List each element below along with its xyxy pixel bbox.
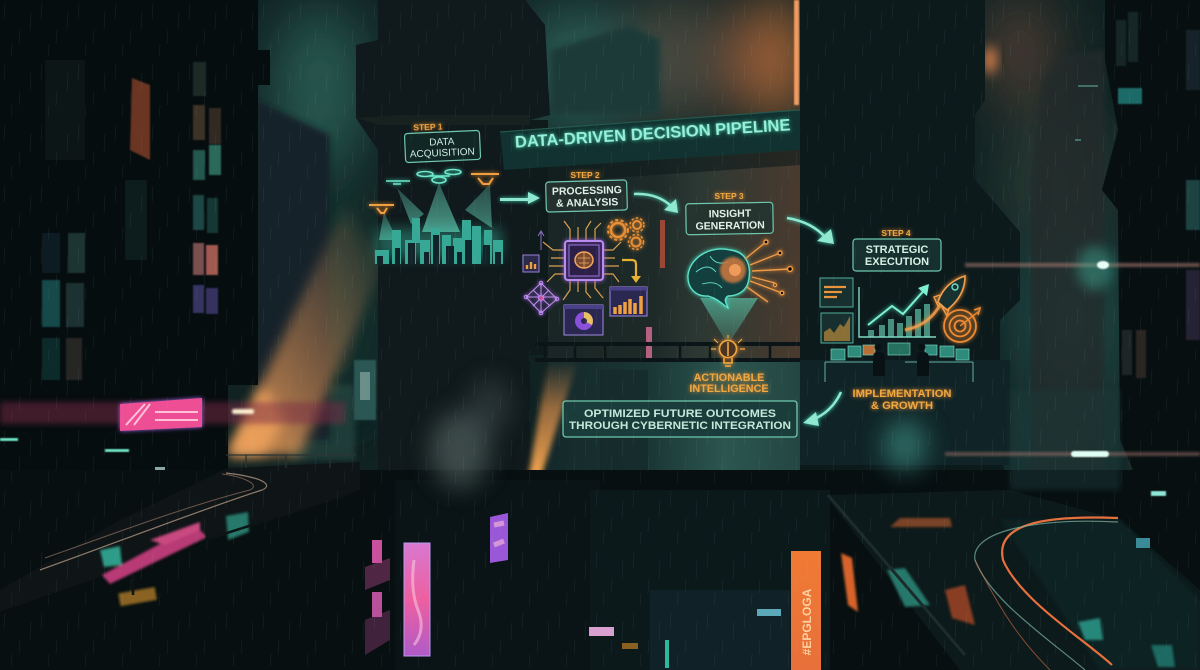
city skyline — [375, 218, 503, 265]
icon: AI chip with brain — [543, 221, 621, 300]
step 1 box: ACQUISITION — [410, 147, 475, 160]
step 4: strategic execution — [820, 228, 980, 412]
icon: neural network — [524, 281, 559, 315]
step 4 box: STRATEGIC — [866, 244, 928, 256]
step 1 box: DATA — [429, 136, 455, 149]
icon: pie chart panel — [564, 305, 603, 335]
step 2 box: & ANALYSIS — [556, 196, 618, 210]
icon: bar chart panel — [610, 287, 647, 316]
step 2 box: PROCESSING — [552, 184, 622, 198]
lower city street level — [0, 390, 1200, 670]
icon: growth chart — [859, 284, 936, 337]
icon: yellow arrow — [622, 260, 641, 283]
outcome box — [563, 401, 797, 437]
icon: projection beam — [700, 298, 758, 345]
step 4 label: STEP 4 — [881, 228, 911, 238]
catwalk bridge — [535, 342, 800, 362]
central tower — [354, 0, 550, 470]
outcome box: THROUGH CYBERNETIC INTEGRATION — [569, 420, 791, 432]
icon: target — [944, 308, 980, 342]
implementation and growth text: & GROWTH — [871, 400, 933, 412]
actionable intelligence text: ACTIONABLE — [694, 372, 764, 384]
actionable intelligence text: INTELLIGENCE — [689, 383, 769, 395]
step 1 label: STEP 1 — [413, 121, 443, 133]
left building — [0, 0, 270, 470]
step 3 box: INSIGHT — [709, 208, 752, 220]
title text: DATA-DRIVEN DECISION PIPELINE — [514, 116, 791, 152]
step 3 box — [686, 202, 773, 235]
step 1 box — [404, 130, 481, 163]
neon signs lower: #EPGLOGA — [800, 588, 814, 655]
implementation and growth text: IMPLEMENTATION — [852, 388, 952, 400]
step 4 box — [853, 239, 941, 271]
icon: gears — [608, 218, 644, 250]
pink neon sign left — [0, 398, 345, 476]
icon: drones scanning city — [369, 170, 503, 265]
step 4 box: EXECUTION — [865, 256, 929, 268]
step 3: insight generation — [686, 191, 792, 395]
railings and light trails left — [40, 455, 356, 595]
arrow: step 3 to step 4 — [787, 218, 834, 244]
neon signs lower — [365, 513, 1150, 670]
step 2 box — [546, 180, 627, 212]
icon: small bar chart — [523, 231, 544, 272]
step 2 label: STEP 2 — [570, 170, 600, 180]
step 3 box: GENERATION — [695, 219, 765, 233]
horizontal lens flares — [945, 246, 1200, 496]
step 2: processing and analysis — [523, 170, 647, 335]
arrow: step 2 to step 3 — [634, 194, 678, 213]
far right building — [1102, 0, 1200, 530]
arrow: step 1 to step 2 — [500, 192, 540, 204]
icon: dashboard panels — [820, 278, 853, 343]
orange light beams — [228, 205, 385, 455]
smoke clouds — [430, 377, 927, 488]
actionable intelligence text — [689, 372, 769, 395]
step 3 label: STEP 3 — [714, 191, 744, 201]
outcome box: OPTIMIZED FUTURE OUTCOMES — [584, 408, 776, 420]
distant buildings — [255, 25, 1105, 500]
icon: brain — [688, 249, 749, 308]
step 1: data acquisition — [369, 121, 503, 265]
implementation and growth text — [852, 388, 952, 412]
rear wall between towers — [528, 150, 800, 498]
banner: title — [500, 110, 800, 185]
street reflections — [100, 512, 1175, 667]
icon: light bulb — [711, 335, 745, 366]
icon: rocket — [905, 276, 965, 330]
light trails right — [828, 495, 1118, 670]
right tower — [794, 0, 1020, 490]
icon: operators at desks — [825, 343, 973, 382]
arrow: step 4 to outcome — [803, 392, 841, 426]
icon: insight rays — [745, 240, 792, 302]
